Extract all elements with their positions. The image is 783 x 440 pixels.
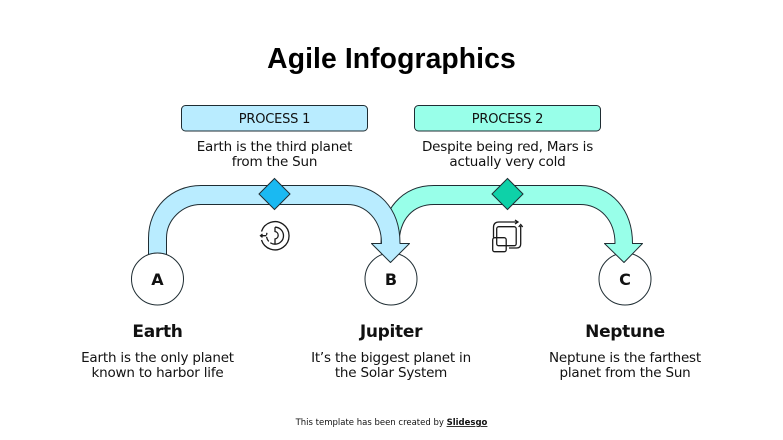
panel: Jupiter bbox=[311, 322, 471, 381]
text: process 1 description: Earth is the third planet bbox=[197, 139, 352, 155]
panel: Jupiter: the Solar System bbox=[335, 365, 447, 381]
panel: Neptune: Neptune bbox=[585, 322, 665, 342]
text: process 1 description: from the Sun bbox=[232, 154, 317, 170]
circle: A: A bbox=[151, 270, 164, 289]
circle: C: C bbox=[619, 270, 631, 289]
panel: process 2 label: PROCESS 2 bbox=[472, 112, 543, 127]
panel: process 1 label: PROCESS 1 bbox=[239, 112, 310, 127]
panel: Jupiter: It’s the biggest planet in bbox=[311, 350, 471, 366]
icon: iterative cycle bbox=[260, 222, 289, 250]
panel: Jupiter: Jupiter bbox=[359, 322, 423, 342]
text: process 2 description: actually very cold bbox=[449, 154, 566, 170]
icon: diamond process 1 bbox=[259, 178, 290, 210]
panel: Neptune bbox=[549, 322, 701, 381]
icon: overlapping loop squares bbox=[493, 220, 523, 252]
text: process 2 description: Despite being red, Mars is bbox=[422, 139, 593, 155]
panel: Earth: Earth bbox=[132, 322, 183, 342]
arrow: process 1 from A to B bbox=[148, 186, 410, 262]
panel: Earth bbox=[81, 322, 234, 381]
circle: B bbox=[365, 253, 417, 305]
footer credit: This template has been created by Slidesgo bbox=[295, 418, 488, 428]
panel: Neptune: planet from the Sun bbox=[559, 365, 691, 381]
icon: diamond process 2 bbox=[492, 178, 523, 210]
circle: A bbox=[132, 253, 184, 305]
title: Agile Infographics bbox=[267, 42, 516, 74]
panel: Earth: Earth is the only planet bbox=[81, 350, 234, 366]
arrow: process 2 from B to C bbox=[381, 186, 642, 262]
panel: Earth: known to harbor life bbox=[92, 365, 223, 381]
panel: process 1 label bbox=[182, 106, 368, 131]
panel: Neptune: Neptune is the farthest bbox=[549, 350, 701, 366]
circle: B: B bbox=[385, 270, 397, 289]
circle: C bbox=[599, 253, 651, 305]
panel: process 2 label bbox=[414, 106, 600, 131]
